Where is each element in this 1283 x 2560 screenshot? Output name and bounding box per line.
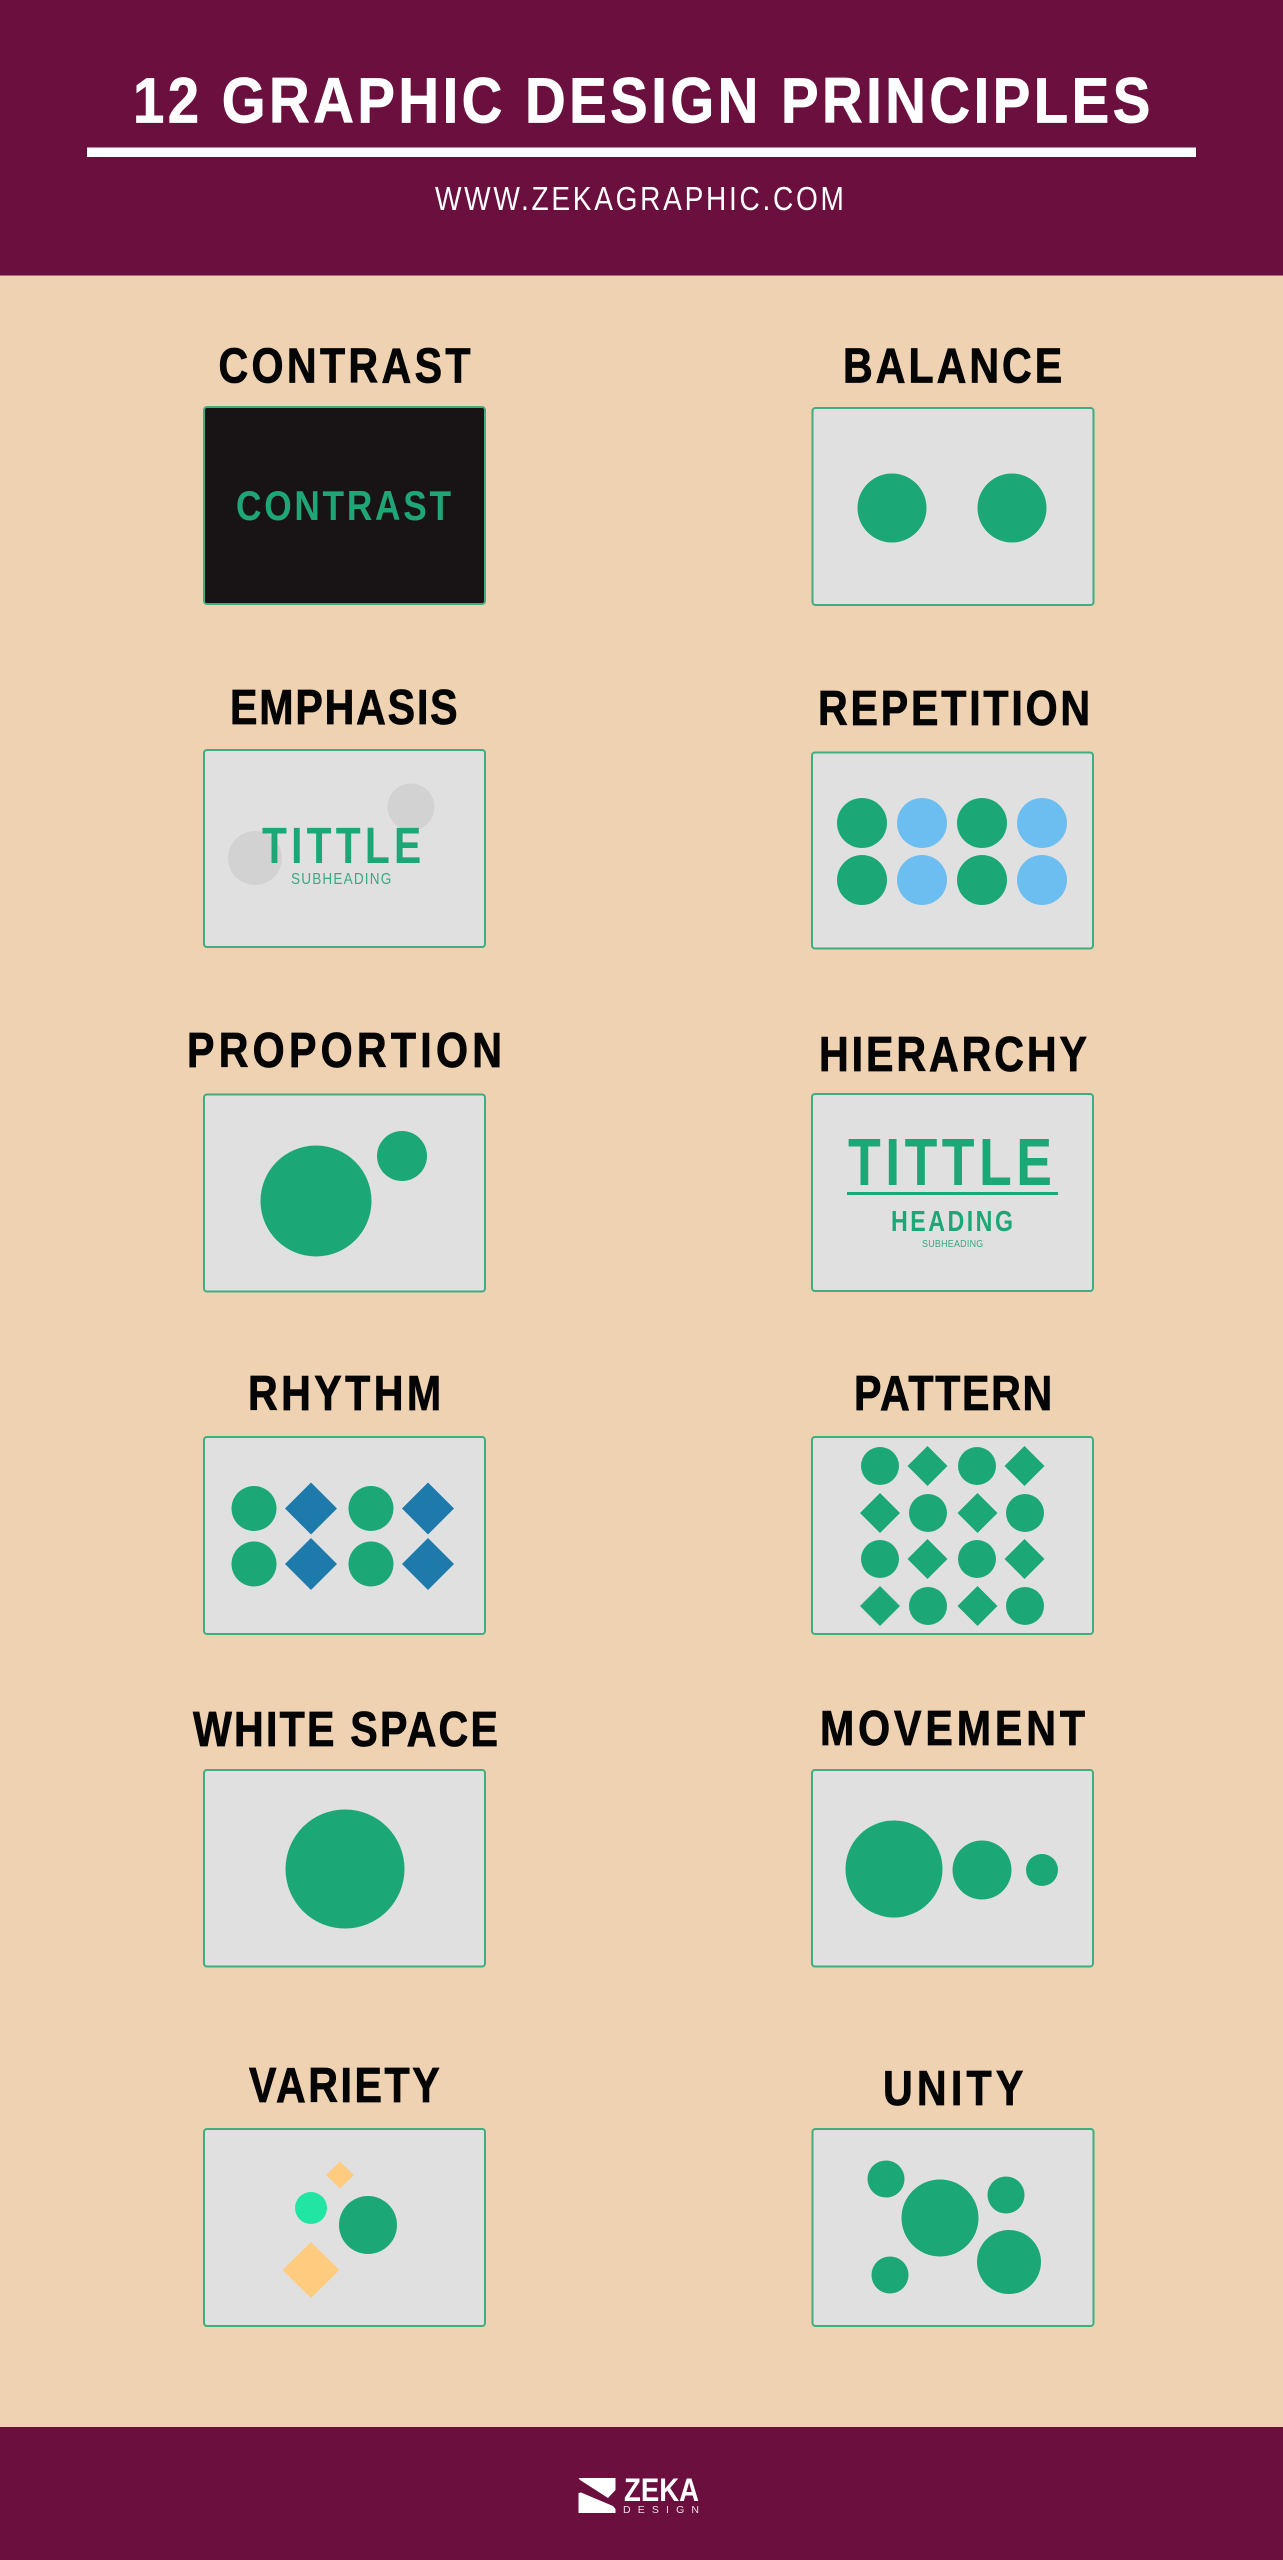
proportion card xyxy=(204,1094,485,1292)
panel: rhythm xyxy=(204,1366,485,1634)
contrast card xyxy=(204,407,485,604)
balance card xyxy=(812,408,1094,605)
panel: repetition xyxy=(812,681,1093,948)
heading: white space: WHITE SPACE xyxy=(193,1702,498,1757)
heading: hierarchy: HIERARCHY xyxy=(819,1027,1087,1082)
heading: pattern: PATTERN xyxy=(854,1366,1052,1421)
heading: repetition: REPETITION xyxy=(818,681,1090,736)
two equal circles xyxy=(858,474,1046,542)
alternating circles and diamonds xyxy=(232,1482,454,1590)
panel: emphasis xyxy=(204,680,485,947)
single circle xyxy=(286,1810,404,1928)
pattern card xyxy=(812,1437,1093,1634)
panel: hierarchy xyxy=(812,1027,1093,1291)
panel: movement xyxy=(812,1701,1093,1966)
movement card xyxy=(812,1770,1093,1966)
hierarchy rule xyxy=(847,1192,1058,1195)
heading: proportion: PROPORTION xyxy=(187,1023,502,1078)
website url: WWW.ZEKAGRAPHIC.COM xyxy=(435,181,844,218)
heading: movement: MOVEMENT xyxy=(820,1701,1085,1756)
heading: emphasis: EMPHASIS xyxy=(230,680,458,735)
footer banner xyxy=(0,2427,1283,2560)
logo tagline: DESIGN xyxy=(623,2504,699,2516)
logo wordmark: ZEKA xyxy=(624,2472,699,2508)
shrinking circles xyxy=(846,1820,1058,1918)
clustered circles xyxy=(868,2160,1041,2294)
unity card xyxy=(812,2129,1094,2326)
heading: contrast: CONTRAST xyxy=(218,338,471,393)
panel: contrast xyxy=(204,338,485,604)
white space card xyxy=(204,1770,485,1966)
rhythm card xyxy=(204,1437,485,1634)
repetition card xyxy=(812,752,1093,948)
emphasis subheading: SUBHEADING xyxy=(291,871,391,888)
icon: zeka logo mark xyxy=(578,2478,616,2513)
panel: pattern xyxy=(812,1366,1093,1634)
heading: variety: VARIETY xyxy=(249,2058,440,2113)
grid of circles and diamonds xyxy=(860,1446,1044,1626)
heading: balance: BALANCE xyxy=(843,338,1062,393)
heading: rhythm: RHYTHM xyxy=(248,1366,441,1421)
emphasis card xyxy=(204,750,485,947)
panel: variety xyxy=(204,2058,485,2326)
variety card xyxy=(204,2129,485,2326)
hierarchy card xyxy=(812,1094,1093,1291)
large and small circles xyxy=(260,1131,427,1256)
emphasis title: TITTLE xyxy=(262,817,421,874)
mixed shapes xyxy=(282,2162,397,2298)
panel: unity xyxy=(812,2061,1094,2326)
header banner xyxy=(0,0,1283,276)
hierarchy heading: HEADING xyxy=(891,1204,1013,1238)
hierarchy title: TITTLE xyxy=(848,1124,1052,1199)
faded background circles xyxy=(228,784,434,885)
heading: unity: UNITY xyxy=(883,2061,1023,2116)
panel: balance xyxy=(812,338,1094,605)
contrast sample word: CONTRAST xyxy=(236,483,451,530)
panel: white space xyxy=(193,1702,498,1966)
title underline xyxy=(87,148,1196,157)
alternating circles xyxy=(837,798,1067,905)
title: 12 GRAPHIC DESIGN PRINCIPLES xyxy=(133,64,1150,136)
panel: proportion xyxy=(187,1023,502,1292)
hierarchy subheading: SUBHEADING xyxy=(922,1238,983,1250)
